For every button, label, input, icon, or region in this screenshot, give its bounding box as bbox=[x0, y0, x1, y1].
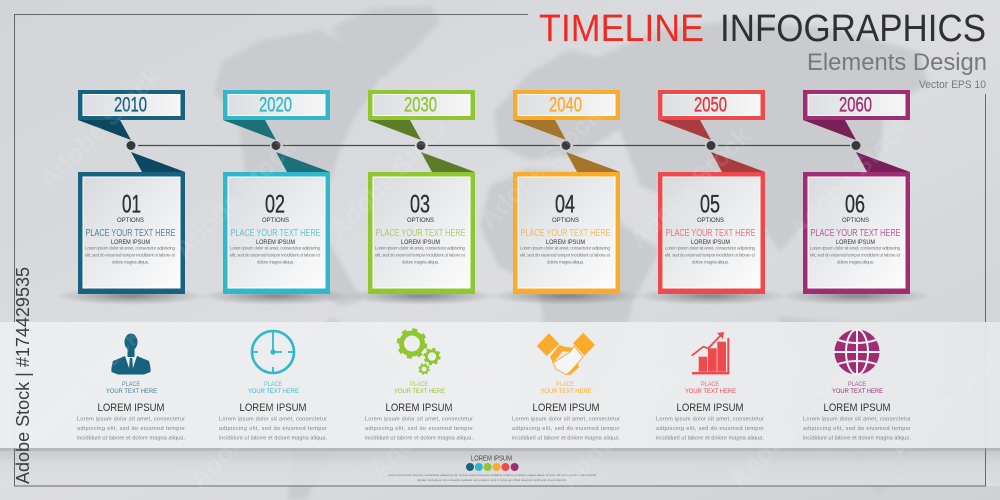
card bbox=[658, 172, 765, 294]
milestone 2010: OPTIONS bbox=[117, 217, 145, 224]
milestone 2040: PLACE YOUR TEXT HERE bbox=[520, 228, 611, 239]
node bbox=[706, 141, 716, 150]
watermarks: Adobe Stock bbox=[183, 360, 317, 494]
milestone 2050: LOREM IPSUM bbox=[691, 239, 730, 246]
milestone 2020: LOREM IPSUM bbox=[256, 239, 295, 246]
milestone 2040: elit, sed do eiusmod tempor incididunt ut labore et bbox=[520, 252, 611, 258]
watermarks: Adobe Stock bbox=[168, 130, 302, 264]
icon: globe bbox=[834, 330, 880, 374]
milestone 2020: OPTIONS bbox=[262, 217, 290, 224]
icon: gears bbox=[398, 330, 440, 374]
body text: incididunt ut labore et dolore magna aliqua. bbox=[656, 436, 764, 442]
column: globe bbox=[803, 330, 911, 442]
heading: LOREM IPSUM bbox=[824, 402, 890, 414]
icon: handshake bbox=[537, 333, 595, 375]
icon: rising bar chart bbox=[692, 332, 729, 374]
milestone 2010 bbox=[78, 90, 185, 294]
body text: Lorem ipsum dolor sit amet, consectetur bbox=[219, 416, 327, 422]
ribbon bbox=[368, 120, 475, 172]
body text: Lorem ipsum dolor sit amet, consectetur bbox=[77, 416, 185, 422]
ribbon bbox=[803, 120, 910, 172]
milestone 2010: Lorem ipsum dolor sit amet, consectetur adipiscing bbox=[85, 246, 176, 250]
milestone 2050: dolore magna aliqua. bbox=[692, 260, 729, 264]
body text: adipiscing elit, sed do eiusmod tempor bbox=[803, 426, 911, 432]
milestone 2040: dolore magna aliqua. bbox=[547, 260, 584, 264]
heading: LOREM IPSUM bbox=[240, 402, 306, 414]
milestone 2040: Lorem ipsum dolor sit amet, consectetur adipiscing bbox=[520, 246, 611, 250]
milestone 2020: PLACE YOUR TEXT HERE bbox=[230, 228, 321, 239]
milestone 2050: PLACE YOUR TEXT HERE bbox=[666, 228, 756, 239]
card bbox=[78, 172, 185, 294]
node bbox=[416, 141, 426, 150]
milestone 2060: 06 bbox=[845, 190, 865, 218]
milestone 2030: OPTIONS bbox=[407, 217, 435, 224]
year box bbox=[513, 90, 620, 120]
milestone 2060: PLACE YOUR TEXT HERE bbox=[810, 228, 901, 239]
watermarks: Adobe Stock bbox=[473, 100, 607, 234]
node bbox=[562, 141, 570, 150]
title bbox=[539, 8, 986, 50]
body text bbox=[365, 416, 473, 442]
caption: PLACE bbox=[122, 381, 140, 388]
ribbon bbox=[658, 120, 765, 172]
caption: PLACE bbox=[410, 381, 428, 388]
year box bbox=[368, 90, 475, 120]
milestone 2010: 2010 bbox=[114, 94, 147, 116]
legend text: pariatur. Excepteur sint occaecat cupidatat non proident, sunt in culpa qui officia deserunt mollit anim id est laborum. bbox=[417, 478, 567, 482]
milestone 2030: 03 bbox=[410, 190, 430, 218]
column: globe: YOUR TEXT HERE bbox=[832, 388, 883, 395]
milestone 2020: 2020 bbox=[259, 94, 292, 116]
card bbox=[513, 172, 620, 294]
milestone 2060 bbox=[803, 90, 910, 294]
subtitle: Elements Design bbox=[807, 49, 987, 76]
milestone 2010: PLACE YOUR TEXT HERE bbox=[86, 228, 176, 239]
milestone 2020: elit, sed do eiusmod tempor incididunt ut labore et bbox=[230, 252, 321, 258]
caption: PLACE bbox=[848, 381, 866, 388]
body text: Lorem ipsum dolor sit amet, consectetur bbox=[803, 416, 911, 422]
timeline line bbox=[138, 144, 850, 146]
milestone 2050: OPTIONS bbox=[697, 217, 725, 224]
body text: adipiscing elit, sed do eiusmod tempor bbox=[656, 426, 764, 432]
milestone 2040: OPTIONS bbox=[552, 217, 580, 224]
lower band bbox=[0, 448, 1000, 486]
watermarks: Adobe Stock bbox=[553, 360, 687, 494]
watermarks: Adobe Stock bbox=[13, 320, 147, 454]
icon: clock bbox=[252, 331, 294, 373]
milestone 2050: Lorem ipsum dolor sit amet, consectetur adipiscing bbox=[665, 246, 756, 250]
year box bbox=[803, 90, 910, 120]
body text bbox=[656, 416, 764, 442]
body text bbox=[77, 416, 185, 442]
body text bbox=[803, 416, 911, 442]
body text: Lorem ipsum dolor sit amet, consectetur bbox=[365, 416, 473, 422]
year box bbox=[223, 90, 330, 120]
body text: Lorem ipsum dolor sit amet, consectetur bbox=[656, 416, 764, 422]
stock credit: Adobe Stock | #174429535 bbox=[13, 267, 33, 484]
milestone 2020: dolore magna aliqua. bbox=[257, 260, 294, 264]
milestone 2060: Lorem ipsum dolor sit amet, consectetur adipiscing bbox=[810, 246, 901, 250]
milestone 2020 bbox=[223, 90, 330, 294]
card bbox=[223, 172, 330, 294]
body text: incididunt ut labore et dolore magna aliqua. bbox=[365, 436, 473, 442]
card bbox=[803, 172, 910, 294]
title: TIMELINE bbox=[539, 8, 704, 50]
milestone 2020: 02 bbox=[265, 190, 285, 218]
column: handshake bbox=[512, 333, 620, 442]
watermarks: Adobe Stock bbox=[33, 60, 167, 194]
footer legend bbox=[388, 456, 596, 482]
milestone 2010: 01 bbox=[122, 190, 141, 218]
column: person: YOUR TEXT HERE bbox=[106, 388, 157, 395]
column: clock: YOUR TEXT HERE bbox=[248, 388, 299, 395]
legend text: Lorem ipsum dolor sit amet, consectetur adipiscing elit, sed do eiusmod tempor incididunt ut labore et dolore magna aliqua. Ut enim ad minim veniam, quis nostrud bbox=[388, 473, 596, 477]
column: clock bbox=[219, 331, 327, 442]
body text: incididunt ut labore et dolore magna aliqua. bbox=[77, 436, 185, 442]
body text: adipiscing elit, sed do eiusmod tempor bbox=[77, 426, 185, 432]
body text bbox=[219, 416, 327, 442]
milestone 2060: dolore magna aliqua. bbox=[837, 260, 874, 264]
milestone 2050: 05 bbox=[700, 190, 720, 218]
column: chart: YOUR TEXT HERE bbox=[685, 388, 736, 395]
body text: Lorem ipsum dolor sit amet, consectetur bbox=[512, 416, 620, 422]
milestone 2060: elit, sed do eiusmod tempor incididunt ut labore et bbox=[810, 252, 901, 258]
milestone 2050: elit, sed do eiusmod tempor incididunt ut labore et bbox=[665, 252, 756, 258]
milestone 2030: 2030 bbox=[404, 94, 437, 116]
milestone 2040: 04 bbox=[555, 190, 575, 218]
heading: LOREM IPSUM bbox=[532, 402, 600, 414]
milestone 2050: 2050 bbox=[694, 94, 727, 116]
icon: businessman bbox=[111, 334, 151, 374]
milestone 2030: elit, sed do eiusmod tempor incididunt ut labore et bbox=[375, 252, 466, 258]
body text: adipiscing elit, sed do eiusmod tempor bbox=[219, 426, 327, 432]
body text bbox=[512, 416, 620, 442]
ribbon bbox=[78, 120, 185, 172]
heading: LOREM IPSUM bbox=[98, 402, 164, 414]
milestone 2030: Lorem ipsum dolor sit amet, consectetur adipiscing bbox=[375, 246, 466, 250]
ribbon bbox=[513, 120, 620, 172]
milestone 2010: LOREM IPSUM bbox=[111, 239, 150, 246]
milestone 2030: LOREM IPSUM bbox=[401, 239, 440, 246]
ribbon bbox=[223, 120, 330, 172]
caption: PLACE bbox=[701, 381, 719, 388]
legend text bbox=[388, 473, 596, 482]
caption: PLACE bbox=[556, 381, 574, 388]
heading: LOREM IPSUM bbox=[386, 402, 452, 414]
legend colour dots bbox=[466, 463, 519, 471]
milestone 2060: OPTIONS bbox=[842, 217, 870, 224]
node bbox=[852, 141, 860, 150]
body text: incididunt ut labore et dolore magna aliqua. bbox=[803, 436, 911, 442]
world map bbox=[214, 6, 928, 500]
watermarks: Adobe Stock bbox=[783, 110, 917, 244]
card bbox=[368, 172, 475, 294]
milestone 2060: 2060 bbox=[839, 94, 872, 116]
body text: incididunt ut labore et dolore magna aliqua. bbox=[512, 436, 620, 442]
card shadows bbox=[55, 287, 932, 305]
milestone 2040: 2040 bbox=[549, 94, 582, 116]
body text: adipiscing elit, sed do eiusmod tempor bbox=[512, 426, 620, 432]
milestone 2040 bbox=[513, 90, 620, 294]
body text: adipiscing elit, sed do eiusmod tempor bbox=[365, 426, 473, 432]
milestone 2060: LOREM IPSUM bbox=[836, 239, 875, 246]
watermarks: Adobe Stock bbox=[323, 110, 457, 244]
body text: incididunt ut labore et dolore magna aliqua. bbox=[219, 436, 327, 442]
node bbox=[126, 141, 136, 150]
column: chart bbox=[656, 332, 764, 442]
vector label: Vector EPS 10 bbox=[919, 79, 986, 91]
column: handshake: YOUR TEXT HERE bbox=[540, 388, 592, 395]
milestone 2020: Lorem ipsum dolor sit amet, consectetur adipiscing bbox=[230, 246, 321, 250]
light band bbox=[0, 322, 1000, 448]
legend heading: LOREM IPSUM bbox=[471, 456, 512, 462]
column: person bbox=[77, 334, 185, 442]
year box bbox=[78, 90, 185, 120]
milestone 2050 bbox=[658, 90, 765, 294]
caption: PLACE bbox=[264, 381, 282, 388]
watermarks: Adobe Stock bbox=[363, 350, 497, 484]
column: gears: YOUR TEXT HERE bbox=[394, 388, 445, 395]
milestone 2040: LOREM IPSUM bbox=[546, 239, 585, 246]
watermarks: Adobe Stock bbox=[723, 360, 857, 494]
milestone 2030: dolore magna aliqua. bbox=[402, 260, 439, 264]
heading: LOREM IPSUM bbox=[676, 402, 744, 414]
node bbox=[272, 141, 280, 150]
milestone 2010: dolore magna aliqua. bbox=[112, 260, 149, 264]
year box bbox=[658, 90, 765, 120]
milestone 2010: elit, sed do eiusmod tempor incididunt ut labore et bbox=[85, 252, 176, 258]
milestone 2030: PLACE YOUR TEXT HERE bbox=[376, 228, 466, 239]
column: gears bbox=[365, 330, 473, 442]
watermarks: Adobe Stock bbox=[623, 120, 757, 254]
milestone 2030 bbox=[368, 90, 475, 294]
